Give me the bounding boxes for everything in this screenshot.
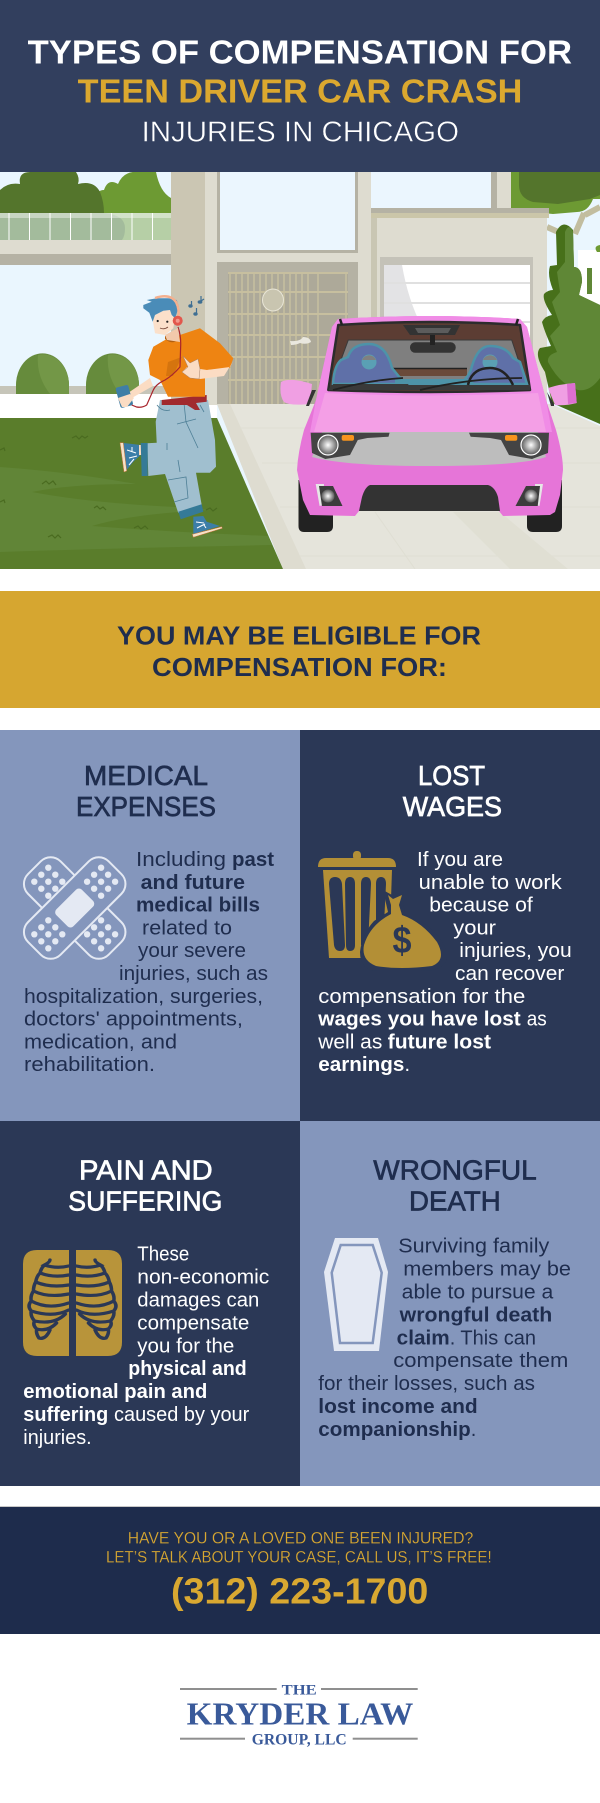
icon: trash can and money bag: $ (392, 920, 412, 962)
head (143, 296, 183, 342)
call to action band: HAVE YOU OR A LOVED ONE BEEN INJURED? (128, 1529, 473, 1547)
title: TEEN DRIVER CAR CRASH (78, 73, 522, 110)
text: lost wages: as (527, 1009, 547, 1031)
heading: pain and suffering: PAIN AND (79, 1154, 213, 1185)
text: pain and suffering: suffering (23, 1404, 108, 1426)
text: pain and suffering: non-economic (137, 1267, 269, 1289)
text: pain and suffering: damages can (137, 1290, 259, 1312)
text: medical expenses: hospitalization, surgeries, (24, 986, 263, 1008)
text: medical expenses: medical bills (136, 895, 260, 917)
text: lost wages: injuries, you (459, 940, 572, 962)
text: pain and suffering: physical and (128, 1358, 247, 1380)
text: pain and suffering: caused by your (114, 1404, 250, 1426)
text: wrongful death: compensate them (393, 1350, 568, 1372)
raised arm and hand (182, 356, 233, 379)
text: medical expenses: Including (136, 849, 226, 871)
call to action band (0, 1506, 600, 1634)
heading: lost wages: LOST (418, 760, 485, 791)
eligibility banner (0, 591, 600, 708)
text: lost wages: earnings (318, 1054, 404, 1076)
heading: wrongful death: DEATH (409, 1186, 501, 1217)
text: lost wages: wages you have lost (317, 1009, 521, 1031)
title: TYPES OF COMPENSATION FOR (28, 33, 572, 70)
pink car (280, 316, 577, 532)
white fence and hedge (538, 224, 600, 424)
eligibility banner: YOU MAY BE ELIGIBLE FOR (117, 621, 481, 651)
icon: coffin (324, 1238, 388, 1351)
belt (162, 395, 207, 410)
hero illustration: teen with headphones and pink car (0, 172, 600, 569)
text: lost wages: your (453, 917, 496, 939)
text: medical expenses: injuries, such as (119, 963, 268, 985)
text: lost wages: well as (317, 1031, 382, 1053)
text: medical expenses: your severe (138, 940, 246, 962)
text: wrongful death: companionship (318, 1419, 471, 1441)
logo: The Kryder Law Group (180, 1682, 418, 1748)
text: wrongful death: . This can (450, 1327, 536, 1349)
text: wrongful death: Surviving family (398, 1236, 549, 1258)
text: wrongful death: . (471, 1419, 476, 1441)
shoe: raised foot (120, 443, 142, 472)
driveway (217, 404, 600, 569)
house front (171, 172, 511, 405)
wheels (298, 480, 562, 532)
bushes behind balcony (0, 172, 171, 213)
headlights (311, 433, 549, 459)
text: medical expenses: medication, and (24, 1031, 177, 1053)
heading: medical expenses (76, 760, 216, 822)
panel: wrongful death (300, 1121, 600, 1486)
eligibility banner: COMPENSATION FOR: (152, 652, 447, 682)
lawn shrubs and low wall (0, 353, 217, 418)
icon: crossed bandages (18, 851, 131, 965)
music notes (189, 296, 204, 315)
text: medical expenses: doctors' appointments, (24, 1009, 243, 1031)
text: lost wages: can recover (455, 963, 565, 985)
text: medical expenses: rehabilitation. (24, 1054, 155, 1076)
text: pain and suffering (23, 1244, 269, 1449)
text: wrongful death: members may be (403, 1259, 571, 1281)
text: lost wages: compensation for the (318, 986, 525, 1008)
fog lights (316, 484, 543, 506)
panel: lost wages (300, 730, 600, 1121)
logo: The Kryder Law Group: KRYDER LAW (187, 1695, 413, 1731)
icon: trash can and money bag (318, 851, 447, 971)
balcony (0, 213, 182, 265)
text: lost wages: because of (429, 895, 533, 917)
hood highlight (314, 393, 546, 432)
text: lost wages (317, 849, 572, 1076)
text: lost wages: unable to work (419, 872, 563, 894)
text: wrongful death: for their losses, such as (318, 1373, 535, 1395)
text: wrongful death: wrongful death (399, 1304, 552, 1326)
panel: pain and suffering (0, 1121, 300, 1486)
logo: The Kryder Law Group: GROUP, LLC (252, 1731, 347, 1748)
text: pain and suffering: These (137, 1244, 189, 1266)
text: lost wages: . (404, 1054, 410, 1076)
text: wrongful death: lost income and (318, 1396, 478, 1418)
orange shirt (148, 328, 233, 397)
heading: wrongful death (373, 1154, 537, 1217)
jeans (147, 400, 216, 513)
grass (0, 418, 283, 569)
text: medical expenses: past (232, 849, 274, 871)
garage (371, 208, 549, 405)
right tree (511, 172, 600, 238)
heading: medical expenses: MEDICAL (84, 760, 208, 791)
panel: medical expenses (0, 730, 300, 1121)
lower grille (359, 485, 500, 511)
text: pain and suffering: emotional pain and (23, 1381, 207, 1403)
text: medical expenses: related to (142, 917, 232, 939)
heading: lost wages: WAGES (403, 791, 502, 822)
call to action band: LET’S TALK ABOUT YOUR CASE, CALL US, IT’S FREE! (106, 1548, 492, 1566)
logo: The Kryder Law Group: THE (282, 1682, 317, 1698)
text: wrongful death (318, 1236, 571, 1441)
teen with headphones (115, 296, 233, 537)
heading: wrongful death: WRONGFUL (373, 1154, 537, 1185)
header band with title (0, 0, 600, 172)
text: pain and suffering: compensate (137, 1312, 249, 1334)
title: INJURIES IN CHICAGO (142, 117, 459, 149)
phone number: (312) 223-1700 (171, 1570, 428, 1611)
heading: pain and suffering: SUFFERING (68, 1186, 222, 1217)
text: wrongful death: able to pursue a (402, 1282, 554, 1304)
title (28, 33, 572, 149)
windshield (328, 319, 530, 392)
text: medical expenses: and future (141, 872, 245, 894)
heading: lost wages (403, 760, 502, 822)
jean cuffs (141, 443, 203, 519)
text: lost wages: If you are (417, 849, 503, 871)
text: lost wages: future lost (388, 1031, 491, 1053)
shoe: standing foot (192, 516, 222, 537)
text: pain and suffering: you for the (137, 1335, 234, 1357)
icon: rib cage (23, 1250, 122, 1356)
arm with phone (115, 378, 153, 408)
grille panel (312, 432, 546, 466)
heading: medical expenses: EXPENSES (76, 791, 216, 822)
earbud cable (132, 327, 181, 407)
upper body (310, 316, 552, 432)
body (297, 316, 563, 516)
text: wrongful death: claim (397, 1327, 450, 1349)
mirrors (280, 380, 577, 406)
text: pain and suffering: injuries. (23, 1427, 92, 1449)
text: medical expenses (24, 849, 274, 1076)
heading: pain and suffering (68, 1154, 222, 1217)
